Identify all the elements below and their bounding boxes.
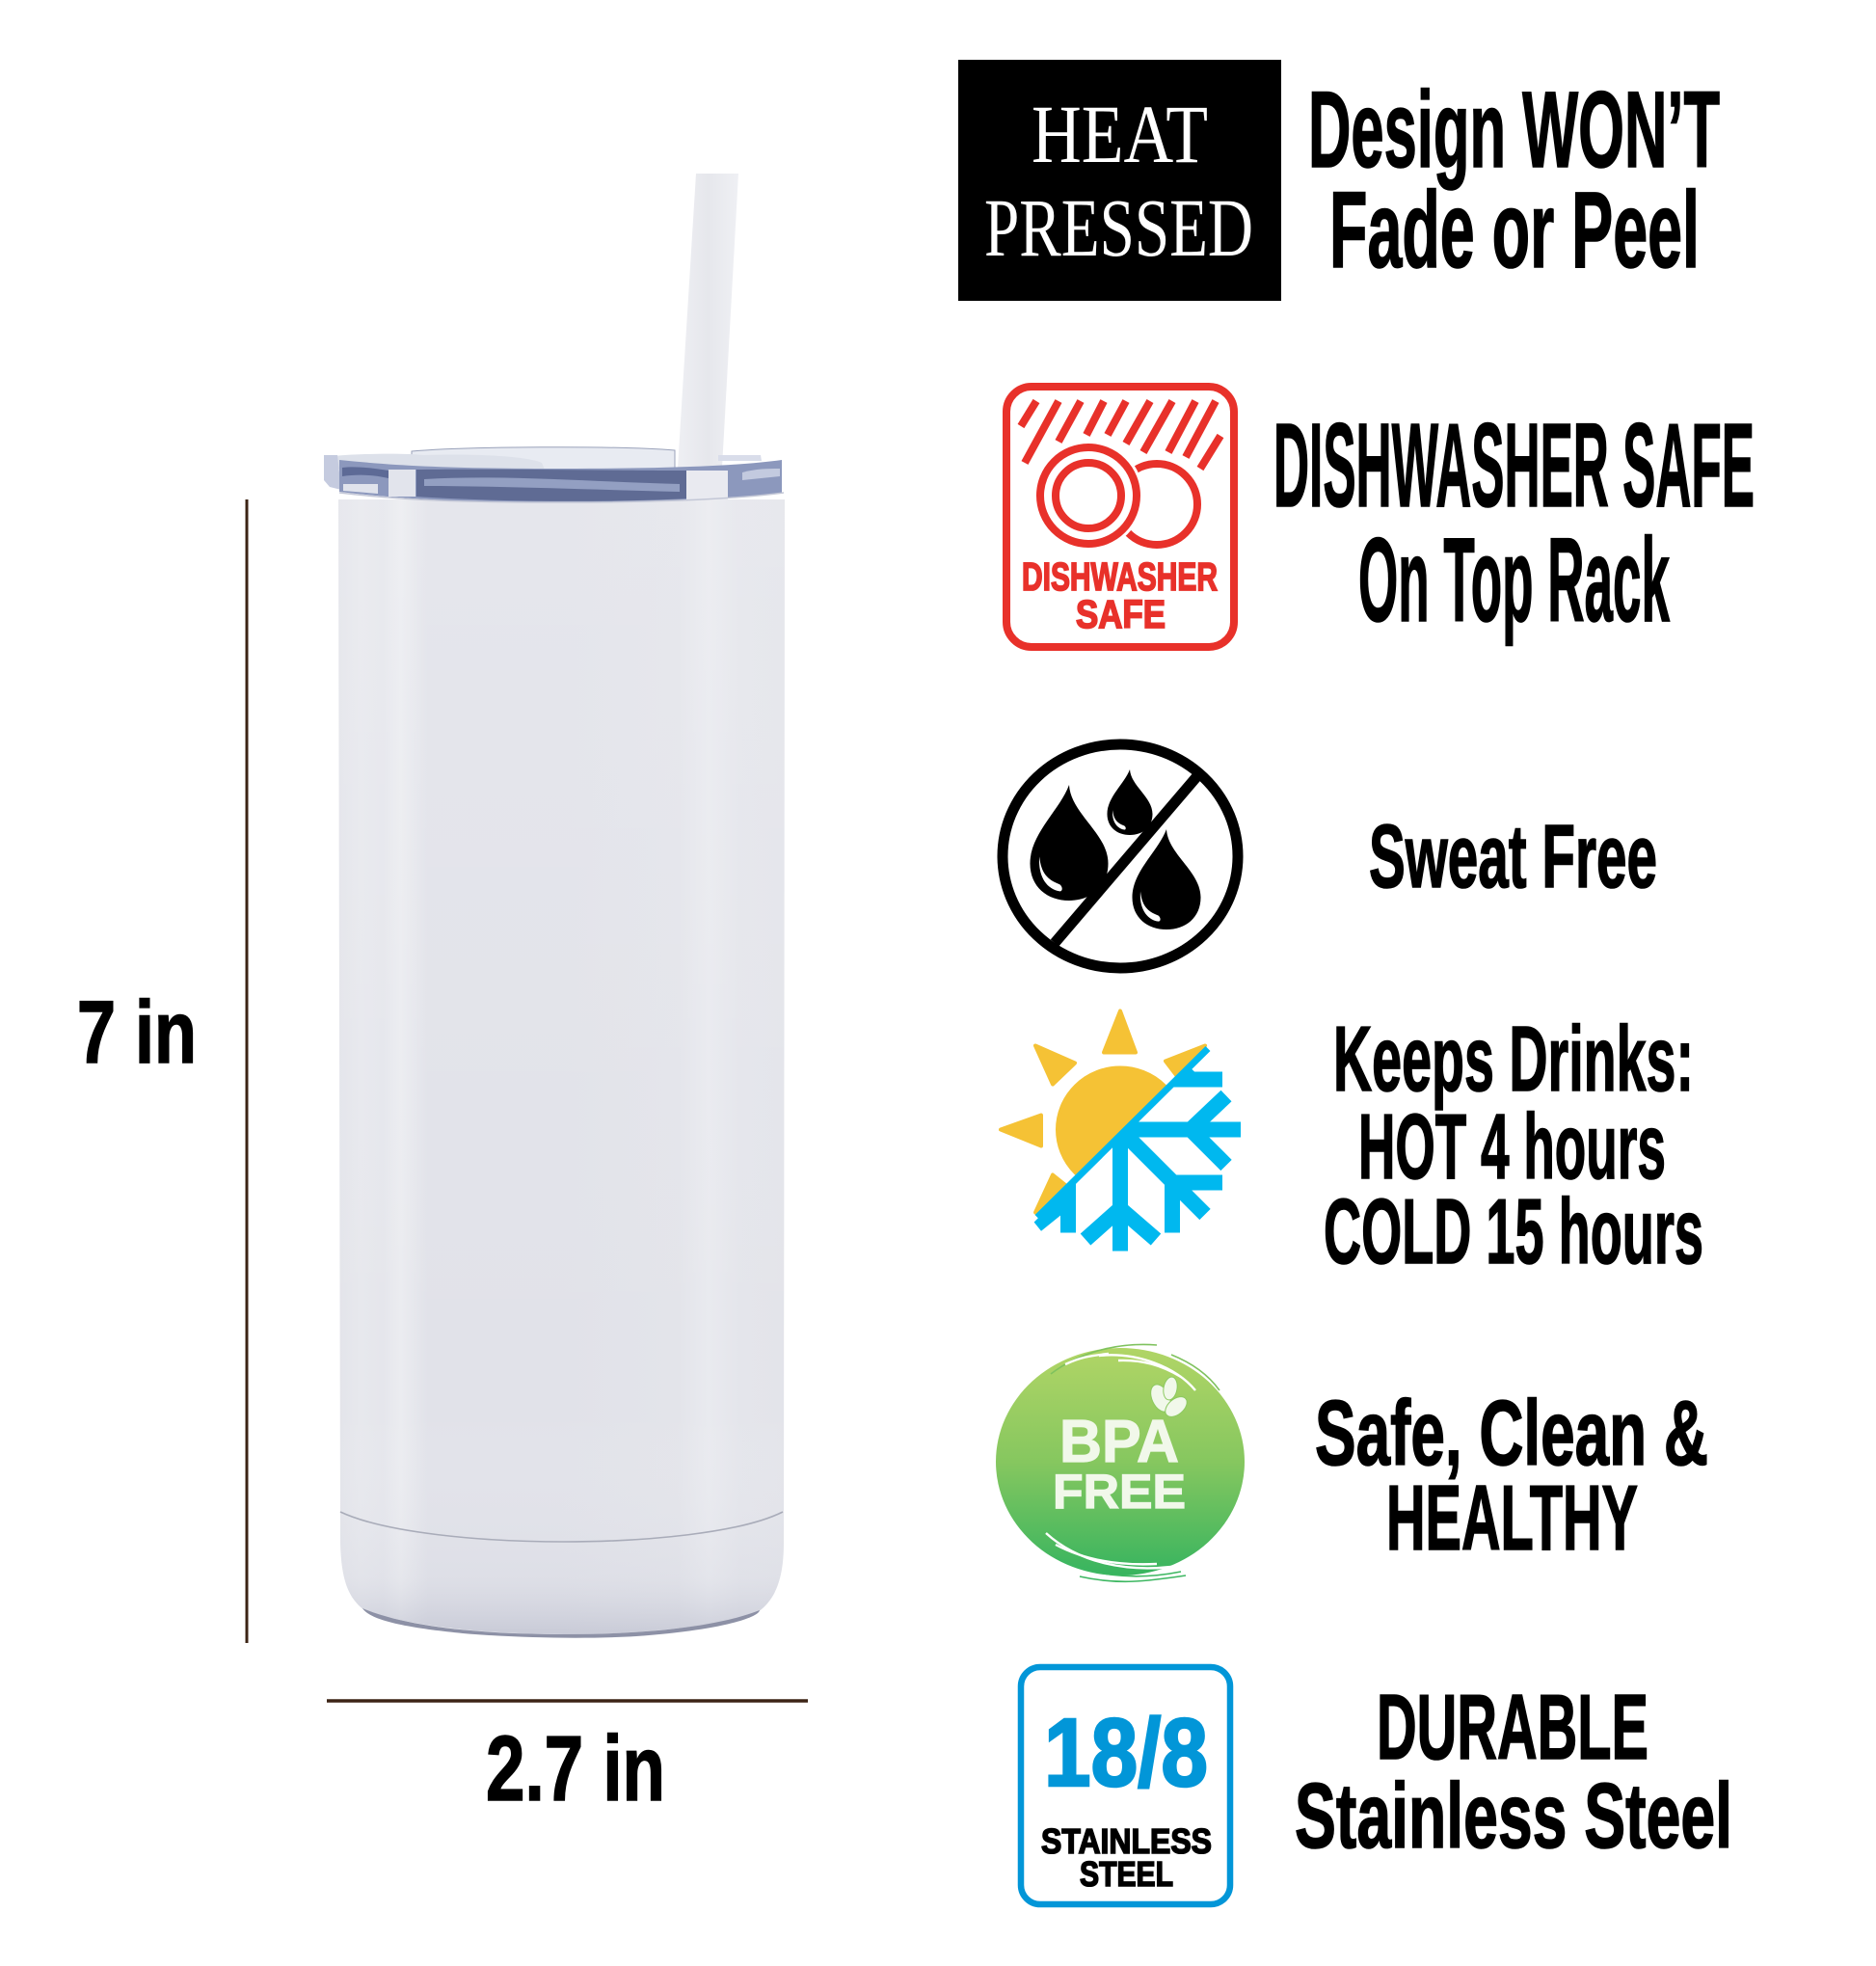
divider	[1037, 1049, 1208, 1217]
tumbler illustration	[324, 174, 785, 1638]
snowflake	[1036, 1068, 1241, 1252]
base shadow	[362, 1608, 760, 1638]
drop: medium	[1132, 829, 1201, 929]
sun	[1001, 1010, 1205, 1213]
text: keeps drinks hot and cold	[1324, 1008, 1703, 1283]
width dimension line	[327, 1699, 808, 1703]
brush strokes	[1051, 1344, 1219, 1581]
icon: 18/8 stainless steel: STAINLESS	[1041, 1821, 1212, 1861]
lid	[324, 447, 784, 502]
tumbler body	[338, 499, 785, 1634]
badge: heat pressed: HEAT	[1032, 88, 1208, 180]
straw	[678, 174, 738, 468]
icon: 18/8 stainless steel: STEEL	[1080, 1854, 1173, 1894]
icon: sweat free	[1003, 744, 1238, 968]
icon: 18/8 stainless steel: 18/8	[1044, 1699, 1208, 1807]
label: 7 in: 7 in	[77, 983, 197, 1082]
icon: bpa free	[996, 1344, 1245, 1581]
height dimension line	[245, 499, 249, 1643]
drop: small	[1107, 769, 1153, 835]
icon: bpa free: FREE	[1053, 1465, 1186, 1519]
text: dishwasher safe on top rack	[1273, 400, 1755, 647]
text: safe clean healthy: HEALTHY	[1386, 1467, 1638, 1570]
text: durable stainless steel	[1295, 1676, 1732, 1868]
icon: hot and cold	[1001, 1010, 1241, 1252]
leaves	[1147, 1376, 1191, 1420]
text: design won't fade or peel	[1308, 69, 1720, 290]
badge: heat pressed: PRESSED	[984, 181, 1253, 274]
badge: heat pressed	[958, 60, 1281, 301]
label: 2.7 in: 2.7 in	[486, 1717, 665, 1820]
icon: dishwasher safe	[1006, 387, 1234, 647]
plates	[1033, 441, 1197, 551]
base seam	[340, 1512, 783, 1542]
badge words: DISHWASHER	[1022, 554, 1218, 599]
drop: large	[1030, 785, 1109, 901]
icon: 18/8 stainless steel	[1021, 1667, 1230, 1904]
water stripes	[1021, 401, 1220, 469]
text: durable stainless steel: DURABLE	[1377, 1676, 1648, 1779]
text: sweat free: Sweat Free	[1369, 806, 1657, 906]
bpa words: BPA	[1059, 1409, 1179, 1475]
text: safe clean healthy	[1315, 1382, 1708, 1570]
icon: dishwasher safe: SAFE	[1076, 592, 1166, 636]
